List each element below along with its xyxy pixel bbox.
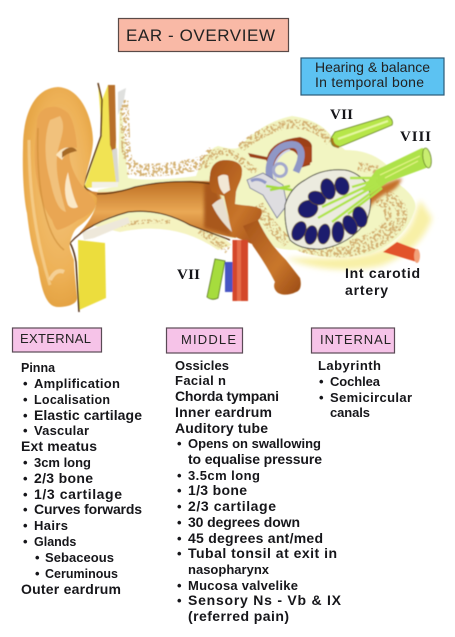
external text list: Glands	[34, 535, 76, 549]
middle text list: Opens on swallowing	[188, 436, 321, 451]
external text list: •	[35, 566, 40, 581]
external text list: Hairs	[34, 518, 68, 533]
external text list: •	[23, 502, 28, 517]
panel: internal	[312, 328, 412, 420]
external text list: Amplification	[34, 376, 120, 391]
middle text list	[175, 358, 342, 624]
external text list: Pinna	[21, 361, 56, 375]
middle text list: Chorda tympani	[175, 388, 279, 404]
callout: hearing and balance: Hearing & balance	[315, 59, 430, 75]
internal carotid artery stump	[383, 242, 420, 263]
label: VIII: VIII	[400, 129, 431, 145]
pinna	[23, 87, 97, 307]
middle text list: Ossicles	[175, 358, 229, 373]
title: EAR - OVERVIEW	[126, 26, 275, 45]
middle text list: nasopharynx	[188, 562, 270, 577]
auditory tube	[243, 220, 301, 295]
panel: middle	[166, 328, 342, 624]
semicircular canals	[247, 137, 312, 218]
middle text list: •	[177, 578, 182, 593]
middle text list: to equalise pressure	[188, 451, 322, 467]
external text list	[21, 361, 142, 597]
vein	[225, 262, 232, 292]
middle text list: •	[177, 499, 182, 514]
middle text list: Auditory tube	[175, 420, 268, 436]
middle text list: •	[177, 483, 182, 498]
external text list: •	[23, 518, 28, 533]
middle text list: •	[177, 546, 182, 561]
vestibulocochlear nerve	[318, 147, 433, 222]
heading: external	[12, 328, 102, 352]
label: VII upper: VII	[330, 107, 353, 123]
middle text list: (referred pain)	[188, 608, 289, 624]
middle text list: 45 degrees ant/med	[188, 530, 323, 546]
middle ear ossicles	[209, 160, 262, 244]
external text list: •	[23, 392, 28, 407]
external text list: Ceruminous	[45, 567, 118, 581]
label: internal carotid artery	[345, 265, 420, 298]
external text list: Ext meatus	[21, 438, 97, 454]
bone speckle	[95, 100, 402, 252]
external text list: •	[35, 550, 40, 565]
middle text list: •	[177, 515, 182, 530]
external text list: •	[23, 455, 28, 470]
external text list: Elastic cartilage	[34, 407, 142, 423]
ear anatomy illustration	[23, 83, 433, 312]
external text list: •	[23, 423, 28, 438]
middle text list: 3.5cm long	[188, 468, 260, 483]
external text list: 3cm long	[34, 455, 91, 470]
internal text list: •	[319, 374, 324, 389]
ear canal	[70, 181, 236, 243]
external text list: •	[23, 534, 28, 549]
middle text list: •	[177, 436, 182, 451]
heading: internal: INTERNAL	[320, 332, 391, 347]
facial nerve upper tube	[331, 116, 392, 147]
lower canal cartilage	[70, 217, 130, 312]
outer halo of temporal bone	[90, 92, 432, 270]
external text list: 1/3 cartilage	[34, 486, 122, 502]
callout: hearing and balance	[301, 58, 444, 95]
middle text list: Mucosa valvelike	[188, 578, 298, 593]
title	[118, 18, 288, 52]
label: VII lower: VII	[177, 267, 200, 283]
internal text list: canals	[330, 405, 370, 420]
panel: external	[12, 328, 142, 597]
cochlea body	[285, 170, 371, 249]
middle text list: Tubal tonsil at exit in	[188, 545, 337, 561]
label: internal carotid artery: Int carotid	[345, 265, 420, 281]
internal text list: Labyrinth	[318, 358, 381, 373]
middle text list: •	[177, 593, 182, 608]
cochlear chambers	[289, 175, 369, 246]
external text list: •	[23, 408, 28, 423]
external text list: Sebaceous	[45, 550, 114, 565]
middle text list: •	[177, 531, 182, 546]
middle text list: •	[177, 468, 182, 483]
middle text list: 30 degrees down	[188, 514, 300, 530]
heading: middle	[166, 328, 242, 353]
external text list: Localisation	[34, 393, 110, 407]
internal carotid in canal	[232, 240, 248, 301]
internal text list: Cochlea	[330, 374, 381, 389]
external text list: •	[23, 471, 28, 486]
internal text list	[318, 358, 412, 420]
middle text list: 2/3 cartilage	[188, 498, 276, 514]
external text list: •	[23, 376, 28, 391]
callout: hearing and balance: In temporal bone	[315, 74, 424, 90]
external text list: 2/3 bone	[34, 470, 93, 486]
middle text list: Inner eardrum	[175, 404, 272, 420]
middle text list: Sensory Ns - Vb & IX	[188, 592, 342, 608]
external text list: •	[23, 487, 28, 502]
rust coloured bone behind nerve	[363, 178, 402, 210]
middle text list: Facial n	[175, 373, 226, 388]
middle text list: 1/3 bone	[188, 482, 247, 498]
external text list: Vascular	[34, 423, 89, 438]
internal text list: Semicircular	[330, 390, 412, 405]
external text list: Outer eardrum	[21, 581, 121, 597]
external text list: Curves forwards	[34, 501, 142, 517]
label: internal carotid artery: artery	[345, 282, 388, 298]
internal text list: •	[319, 390, 324, 405]
facial nerve lower tube	[207, 259, 225, 299]
heading: middle: MIDDLE	[181, 332, 236, 347]
upper canal cartilage	[84, 83, 126, 194]
heading: external: EXTERNAL	[20, 331, 91, 346]
